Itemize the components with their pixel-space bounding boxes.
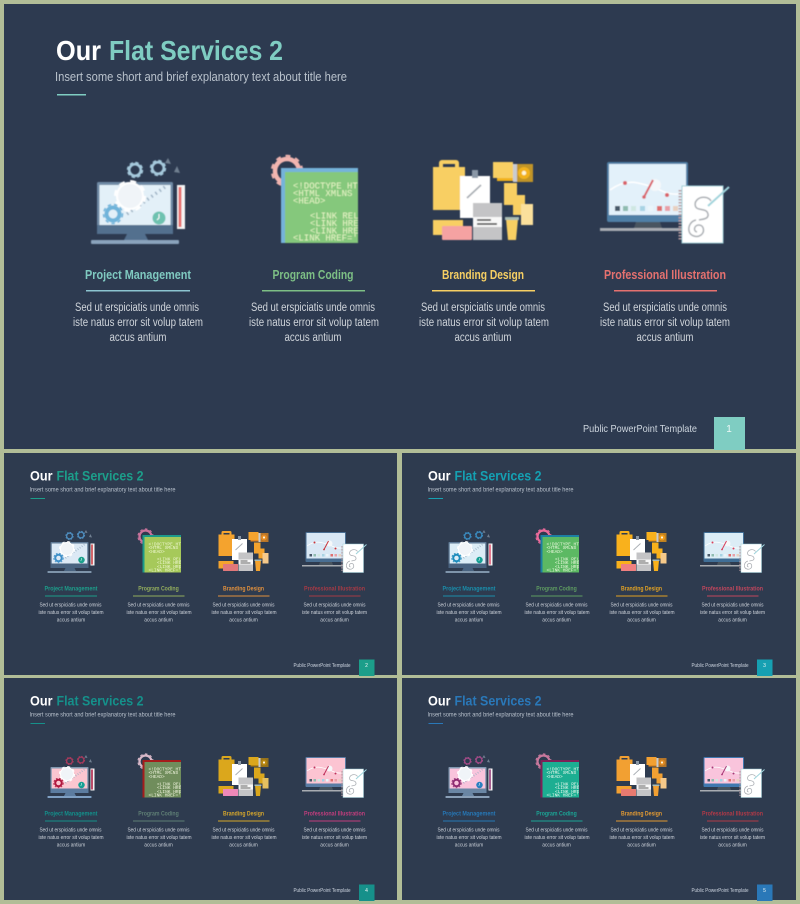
column: program coding: iste natus error sit volup tatem <box>126 835 192 841</box>
slide background <box>402 678 796 900</box>
title: Flat Services 2 <box>56 468 144 484</box>
subtitle: Insert some short and brief explanatory text about title here <box>428 486 574 494</box>
column: professional illustration: iste natus error sit volup tatem <box>700 610 765 616</box>
icon: project management monitor with gears <box>48 755 94 798</box>
column: program coding: accus antium <box>284 332 342 344</box>
column: professional illustration: accus antium <box>320 618 349 624</box>
icon: program coding panel: <HEAD> <box>148 549 165 555</box>
icon: program coding panel: <LINK REL= <box>310 212 364 222</box>
column: program coding: Sed ut erspiciatis unde omnis <box>128 602 190 608</box>
icon: program coding panel: <LINK REL= <box>157 556 184 562</box>
column: program coding: iste natus error sit volup tatem <box>524 610 590 616</box>
title accent line <box>57 94 86 96</box>
subtitle: Insert some short and brief explanatory text about title here <box>55 70 347 84</box>
icon: program coding panel: <LINK HREF=' <box>148 792 181 798</box>
icon: program coding panel: <HEAD> <box>293 196 325 206</box>
column: project management: Project Management <box>44 586 98 592</box>
slide background <box>402 453 796 675</box>
icon: program coding panel: <!DOCTYPE HT <box>293 182 358 192</box>
column: professional illustration <box>600 268 730 344</box>
title accent line <box>30 498 45 499</box>
icon: project management monitor with gears <box>446 530 492 573</box>
slide background <box>4 4 796 449</box>
icon: program coding panel: <LINK REL= <box>555 556 582 562</box>
column: project management <box>436 586 502 624</box>
icon: project management monitor with gears <box>446 755 492 798</box>
column: program coding: accus antium <box>144 842 173 848</box>
page number badge <box>757 660 772 676</box>
icon: professional illustration <box>302 532 366 572</box>
icon: program coding panel: <HTML XMLNS <box>546 770 577 776</box>
column: branding design: accus antium <box>627 842 656 848</box>
title: Our <box>56 35 101 66</box>
page number badge <box>359 884 374 901</box>
icon: program coding panel: <HTML XMLNS <box>148 545 179 551</box>
column: branding design: Sed ut erspiciatis unde omnis <box>212 602 275 608</box>
column: professional illustration: Sed ut erspiciatis unde omnis <box>702 602 764 608</box>
column: project management: iste natus error sit volup tatem <box>38 835 104 841</box>
column: program coding: Sed ut erspiciatis unde omnis <box>526 602 588 608</box>
icon: program coding panel: <LINK REL= <box>157 781 184 787</box>
column: branding design: iste natus error sit volup tatem <box>610 610 675 616</box>
icon: program coding panel: <LINK REL= <box>555 781 582 787</box>
column: branding design: Sed ut erspiciatis unde omnis <box>421 302 545 314</box>
column: professional illustration: iste natus error sit volup tatem <box>600 317 730 329</box>
title: Flat Services 2 <box>109 35 283 66</box>
icon: program coding panel: <HEAD> <box>546 549 563 555</box>
column: professional illustration: Sed ut erspiciatis unde omnis <box>603 302 727 314</box>
column: project management <box>38 810 104 848</box>
footer text: Public PowerPoint Template <box>692 663 749 669</box>
column: program coding <box>126 810 192 848</box>
column: project management: iste natus error sit volup tatem <box>73 317 203 329</box>
column: branding design: iste natus error sit volup tatem <box>212 610 277 616</box>
column: program coding: Sed ut erspiciatis unde omnis <box>251 302 375 314</box>
column: project management: accus antium <box>57 618 85 624</box>
page number badge: 3 <box>763 663 766 669</box>
column: project management: accus antium <box>455 842 483 848</box>
page number badge: 2 <box>365 663 368 669</box>
icon: program coding panel: <!DOCTYPE HT <box>148 766 181 772</box>
column: project management: Sed ut erspiciatis unde omnis <box>40 602 102 608</box>
icon: program coding panel: <LINK HREF <box>310 219 364 229</box>
title: Flat Services 2 <box>56 692 144 708</box>
column: professional illustration: accus antium <box>718 618 747 624</box>
column: project management: iste natus error sit volup tatem <box>436 835 502 841</box>
icon: program coding panel: <HEAD> <box>148 774 165 780</box>
column: program coding: iste natus error sit volup tatem <box>249 317 379 329</box>
icon: program coding panel <box>138 529 184 573</box>
icon: professional illustration <box>302 757 366 798</box>
subtitle: Insert some short and brief explanatory text about title here <box>428 712 574 718</box>
column: project management: iste natus error sit volup tatem <box>38 610 104 616</box>
page number badge <box>359 660 374 676</box>
column: professional illustration <box>302 810 367 848</box>
icon: professional illustration <box>700 532 764 572</box>
icon: program coding panel: <HTML XMLNS <box>293 189 352 199</box>
column: professional illustration: Sed ut erspiciatis unde omnis <box>702 828 764 834</box>
page number badge <box>757 884 772 901</box>
column: project management: Sed ut erspiciatis unde omnis <box>438 828 500 834</box>
icon: program coding panel: <LINK HREF=' <box>546 567 579 573</box>
column: professional illustration <box>700 586 765 624</box>
icon: program coding panel: <!DOCTYPE HT <box>546 766 579 772</box>
column: branding design <box>212 586 277 624</box>
icon: program coding panel: <LINK HREF <box>555 789 582 795</box>
column: branding design <box>610 586 675 624</box>
column: branding design: Sed ut erspiciatis unde omnis <box>610 828 673 834</box>
footer text: Public PowerPoint Template <box>294 888 351 894</box>
title: Flat Services 2 <box>454 692 542 708</box>
icon: program coding panel: <HTML XMLNS <box>546 545 577 551</box>
footer text: Public PowerPoint Template <box>294 663 351 669</box>
title: Our <box>30 468 53 484</box>
icon: program coding panel: <HTML XMLNS <box>148 770 179 776</box>
column: project management: accus antium <box>455 618 483 624</box>
icon: program coding panel: <LINK HREF <box>157 560 184 566</box>
slide 1: large service slide <box>4 4 796 450</box>
column: professional illustration: Sed ut erspiciatis unde omnis <box>304 602 366 608</box>
column: branding design <box>212 810 277 848</box>
column: program coding: iste natus error sit volup tatem <box>524 835 590 841</box>
slide 2: green theme thumbnail <box>4 453 397 676</box>
column: branding design: accus antium <box>229 618 258 624</box>
slide background <box>4 678 397 900</box>
column: project management: Sed ut erspiciatis unde omnis <box>75 302 199 314</box>
icon: program coding panel: <LINK HREF <box>157 785 184 791</box>
column: project management: iste natus error sit volup tatem <box>436 610 502 616</box>
column: program coding <box>249 268 379 344</box>
column: branding design: accus antium <box>229 842 258 848</box>
column: branding design: iste natus error sit volup tatem <box>610 835 675 841</box>
icon: program coding panel: <LINK HREF <box>555 785 582 791</box>
column: project management: Project Management <box>44 810 98 818</box>
title <box>56 35 283 66</box>
title accent line <box>428 723 443 724</box>
icon: branding design stationery <box>218 531 268 571</box>
footer text: Public PowerPoint Template <box>692 888 749 894</box>
column: program coding: Sed ut erspiciatis unde omnis <box>128 828 190 834</box>
icon: program coding panel: <HEAD> <box>546 774 563 780</box>
title: Flat Services 2 <box>454 468 542 484</box>
column: program coding <box>524 586 590 624</box>
column: project management <box>73 268 203 344</box>
column: project management: Project Management <box>85 268 192 282</box>
title <box>428 468 542 484</box>
column: professional illustration: Professional Illustration <box>604 268 726 282</box>
icon: professional illustration <box>700 757 764 798</box>
icon: program coding panel: <!DOCTYPE HT <box>148 541 181 547</box>
column: program coding: accus antium <box>542 618 571 624</box>
title: Our <box>428 692 451 708</box>
column: professional illustration: Professional Illustration <box>304 586 365 592</box>
column: program coding: Program Coding <box>536 810 577 818</box>
title accent line <box>428 498 443 499</box>
column: professional illustration: iste natus error sit volup tatem <box>700 835 765 841</box>
title: Our <box>30 692 53 708</box>
icon: program coding panel: <LINK HREF <box>310 226 364 236</box>
column: professional illustration: Sed ut erspiciatis unde omnis <box>304 828 366 834</box>
column: branding design: accus antium <box>627 618 656 624</box>
subtitle: Insert some short and brief explanatory text about title here <box>30 712 176 718</box>
column: branding design: Branding Design <box>223 586 264 592</box>
column: branding design: Branding Design <box>223 810 264 818</box>
icon: program coding panel: <LINK HREF <box>555 564 582 570</box>
column: branding design: Sed ut erspiciatis unde omnis <box>212 828 275 834</box>
column: program coding: accus antium <box>542 842 571 848</box>
column: professional illustration: Professional Illustration <box>304 810 365 818</box>
icon: branding design stationery <box>218 756 268 796</box>
icon: branding design stationery <box>433 160 533 240</box>
column: program coding: Program Coding <box>138 586 179 592</box>
column: program coding: Program Coding <box>536 586 577 592</box>
column: project management <box>436 810 502 848</box>
column: branding design: iste natus error sit volup tatem <box>419 317 549 329</box>
column: professional illustration: Professional Illustration <box>702 810 763 818</box>
title <box>428 692 542 708</box>
column: professional illustration: accus antium <box>320 842 349 848</box>
icon: project management monitor with gears <box>91 158 185 244</box>
column: branding design: Branding Design <box>621 586 662 592</box>
icon: program coding panel: <LINK HREF <box>157 564 184 570</box>
column: project management: accus antium <box>110 332 166 344</box>
icon: program coding panel <box>272 156 364 244</box>
title accent line <box>30 723 45 724</box>
column: program coding: accus antium <box>144 618 173 624</box>
icon: branding design stationery <box>616 531 666 571</box>
icon: branding design stationery <box>616 756 666 796</box>
icon: program coding panel: <LINK HREF=' <box>546 792 579 798</box>
column: professional illustration <box>302 586 367 624</box>
icon: professional illustration <box>600 162 729 243</box>
slide 4: pink and red theme thumbnail <box>4 678 397 901</box>
column: program coding: Program Coding <box>138 810 179 818</box>
icon: program coding panel <box>536 754 582 798</box>
column: branding design: Branding Design <box>442 268 524 282</box>
column: project management: Sed ut erspiciatis unde omnis <box>40 828 102 834</box>
title <box>30 468 144 484</box>
icon: program coding panel: <LINK HREF=' <box>293 234 358 244</box>
column: professional illustration: iste natus error sit volup tatem <box>302 610 367 616</box>
column: project management: Sed ut erspiciatis unde omnis <box>438 602 500 608</box>
column: branding design: iste natus error sit volup tatem <box>212 835 277 841</box>
icon: program coding panel: <LINK HREF <box>157 789 184 795</box>
slide 5: blue and magenta theme thumbnail <box>402 678 796 901</box>
column: program coding: Program Coding <box>272 268 354 282</box>
column: branding design: Branding Design <box>621 810 662 818</box>
title <box>30 692 144 708</box>
page number badge: 1 <box>726 424 732 435</box>
column: project management: accus antium <box>57 842 85 848</box>
column: project management: Project Management <box>442 586 496 592</box>
icon: program coding panel: <!DOCTYPE HT <box>546 541 579 547</box>
column: program coding: iste natus error sit volup tatem <box>126 610 192 616</box>
page number badge: 5 <box>763 888 766 894</box>
column: professional illustration: accus antium <box>636 332 694 344</box>
icon: program coding panel <box>138 754 184 798</box>
column: branding design: accus antium <box>454 332 512 344</box>
footer text: Public PowerPoint Template <box>583 423 697 435</box>
page number badge <box>714 417 745 450</box>
column: professional illustration <box>700 810 765 848</box>
column: branding design <box>419 268 549 344</box>
column: program coding <box>126 586 192 624</box>
icon: project management monitor with gears <box>48 530 94 573</box>
column: project management: Project Management <box>442 810 496 818</box>
column: program coding <box>524 810 590 848</box>
column: professional illustration: iste natus error sit volup tatem <box>302 835 367 841</box>
subtitle: Insert some short and brief explanatory text about title here <box>30 486 176 494</box>
slide background <box>4 453 397 675</box>
column: program coding: Sed ut erspiciatis unde omnis <box>526 828 588 834</box>
icon: program coding panel: <LINK HREF <box>555 560 582 566</box>
title: Our <box>428 468 451 484</box>
column: branding design: Sed ut erspiciatis unde omnis <box>610 602 673 608</box>
icon: program coding panel <box>536 529 582 573</box>
column: branding design <box>610 810 675 848</box>
column: project management <box>38 586 104 624</box>
page number badge: 4 <box>365 888 368 894</box>
column: professional illustration: Professional Illustration <box>702 586 763 592</box>
column: professional illustration: accus antium <box>718 842 747 848</box>
icon: program coding panel: <LINK HREF=' <box>148 567 181 573</box>
slide 3: teal theme thumbnail <box>402 453 796 676</box>
